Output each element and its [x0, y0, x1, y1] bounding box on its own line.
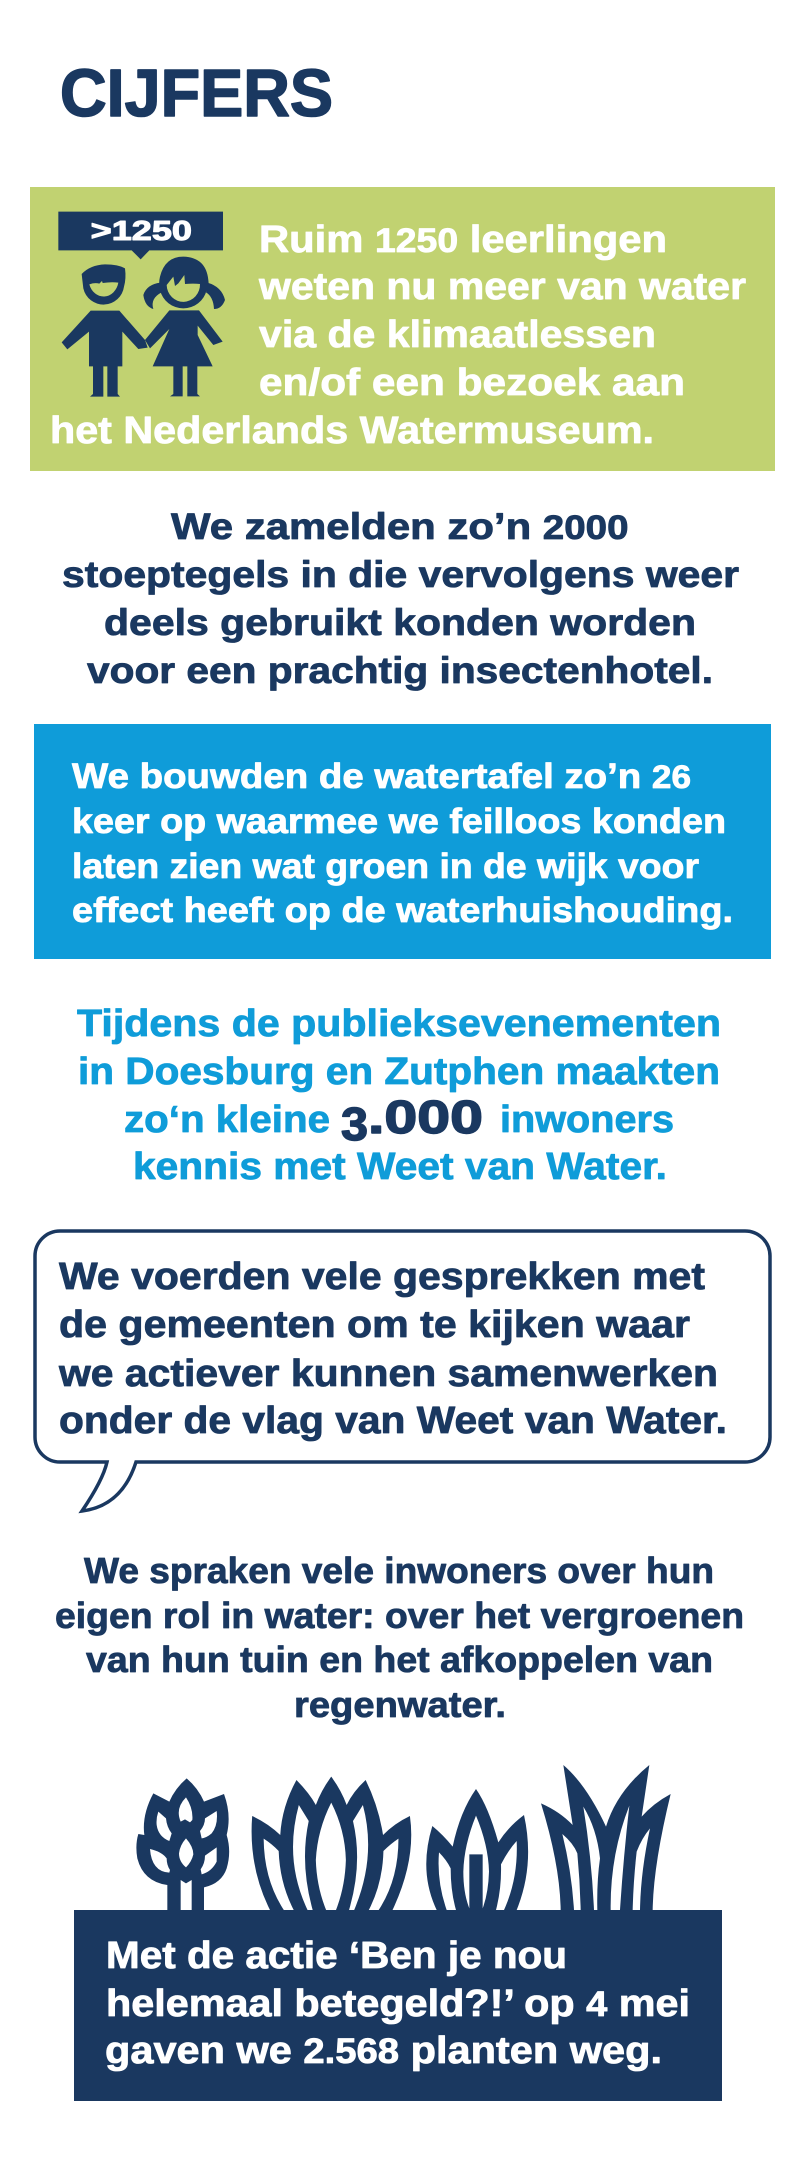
panel text: en/of een bezoek aan	[259, 362, 685, 404]
text block: stoeptegels: voor een prachtig insectenhotel.	[87, 650, 713, 691]
icon: two children with speech banner: >1250	[91, 215, 192, 246]
text block: publieksevenementen: inwoners	[500, 1099, 674, 1141]
panel text: keer op waarmee we feilloos konden	[72, 802, 726, 841]
panel text: effect heeft op de waterhuishouding.	[72, 891, 733, 930]
text block: publieksevenementen	[77, 1003, 721, 1188]
text block: stoeptegels: deels gebruikt konden worden	[104, 602, 696, 643]
panel: school pupils	[30, 187, 775, 471]
text block: publieksevenementen: kennis met Weet van Water.	[133, 1146, 667, 1188]
panel text: via de klimaatlessen	[259, 314, 656, 356]
icon: three-leaf plant	[426, 1789, 528, 1910]
panel text	[72, 757, 733, 930]
panel text: het Nederlands Watermuseum.	[50, 410, 654, 452]
bubble text: we actiever kunnen samenwerken	[58, 1353, 718, 1395]
icon: two children with speech banner	[58, 212, 225, 397]
icon: grass plant	[541, 1765, 671, 1910]
number: 3.000: .000	[368, 1091, 483, 1143]
speech bubble: gesprekken	[35, 1231, 770, 1511]
bubble text: onder de vlag van Weet van Water.	[59, 1400, 727, 1442]
panel text: laten zien wat groen in de wijk voor	[72, 847, 699, 886]
panel text: Ruim 1250 leerlingen	[259, 219, 667, 261]
text block: stoeptegels: stoeptegels in die vervolgens weer	[62, 554, 739, 595]
icon: wheat plant	[136, 1778, 229, 1910]
panel text: weten nu meer van water	[258, 266, 746, 308]
text block: publieksevenementen: zo‘n kleine	[124, 1099, 330, 1141]
number: 3.000: 3	[341, 1098, 368, 1150]
text block: inwoners: eigen rol in water: over het vergroenen	[55, 1595, 744, 1636]
panel text: Met de actie ‘Ben je nou	[106, 1935, 567, 1977]
text block: publieksevenementen: Tijdens de publieksevenementen	[77, 1003, 721, 1045]
text block: stoeptegels: We zamelden zo’n 2000	[171, 506, 628, 547]
panel: watertafel	[34, 724, 771, 959]
panel text: helemaal betegeld?!’ op 4 mei	[106, 1983, 690, 2025]
text block: inwoners: van hun tuin en het afkoppelen van	[86, 1639, 713, 1680]
panel text	[105, 1935, 690, 2072]
panel text: gaven we 2.568 planten weg.	[105, 2030, 662, 2072]
bubble text	[58, 1256, 727, 1442]
number: 3.000	[341, 1091, 483, 1150]
text block: stoeptegels	[62, 506, 739, 691]
text block: inwoners	[55, 1550, 744, 1725]
panel text: We bouwden de watertafel zo’n 26	[72, 757, 691, 796]
icon: tulip-leaf plant	[252, 1777, 411, 1910]
bubble text: de gemeenten om te kijken waar	[59, 1304, 690, 1346]
bubble text: We voerden vele gesprekken met	[59, 1256, 705, 1298]
text block: inwoners: We spraken vele inwoners over hun	[84, 1550, 714, 1591]
text block: inwoners: regenwater.	[294, 1684, 506, 1725]
title: CIJFERS	[60, 56, 333, 131]
panel text	[50, 219, 746, 452]
text block: publieksevenementen: in Doesburg en Zutphen maakten	[78, 1051, 720, 1093]
panel: plant giveaway	[74, 1910, 722, 2101]
